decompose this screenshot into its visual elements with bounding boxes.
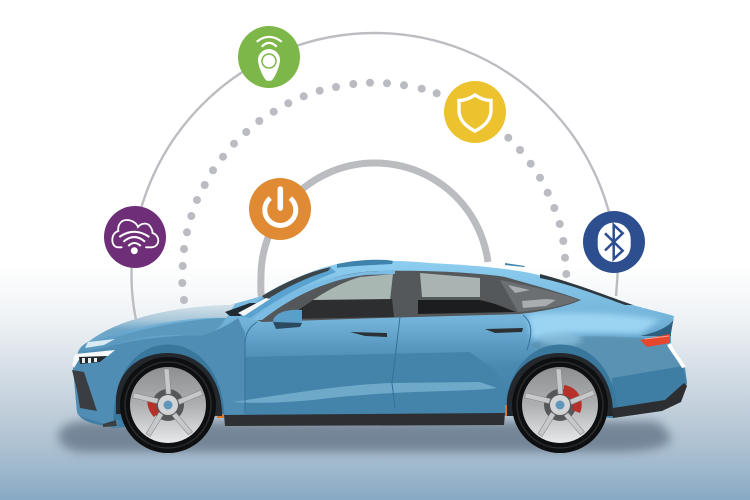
rear quarter window xyxy=(500,280,578,312)
rear diffuser xyxy=(613,383,687,418)
arch bands xyxy=(118,349,613,420)
A-pillar xyxy=(252,270,395,320)
rear lower band xyxy=(612,366,687,408)
tail white edge xyxy=(667,343,686,368)
rear wheel xyxy=(512,357,608,453)
car shadow xyxy=(58,421,670,452)
roof strip xyxy=(337,260,393,268)
wheel arches xyxy=(116,353,222,416)
orange trim xyxy=(217,405,510,418)
glasshouse frame xyxy=(257,271,581,322)
dotted connection arc xyxy=(178,79,570,304)
front wheel xyxy=(120,357,216,453)
inner connection arc xyxy=(261,163,488,300)
tail crease xyxy=(640,318,674,336)
cowl and wiper xyxy=(225,303,262,316)
car body xyxy=(73,260,687,428)
icon: cloud wifi xyxy=(104,206,166,268)
side mirror xyxy=(273,310,302,329)
side sill xyxy=(224,413,505,426)
door highlight strip xyxy=(233,382,497,403)
door lines xyxy=(245,315,531,413)
tail light xyxy=(640,334,670,347)
icon: power button xyxy=(249,178,311,240)
rear haunch highlight xyxy=(528,313,660,340)
rear door window xyxy=(420,273,480,297)
rear arch highlight xyxy=(538,334,582,346)
icon: security shield xyxy=(444,81,506,143)
outer connection arc xyxy=(132,33,618,320)
front window xyxy=(313,274,393,300)
rear glass edge xyxy=(540,274,633,305)
hood crease and fender xyxy=(110,318,226,340)
headlight xyxy=(72,339,115,368)
front grille xyxy=(72,370,97,411)
car xyxy=(60,255,700,453)
windshield xyxy=(238,268,336,318)
icon: wireless remote key xyxy=(238,26,300,88)
rear quarter panel xyxy=(530,336,686,385)
hood xyxy=(85,304,235,345)
door handles xyxy=(350,328,523,337)
icon: bluetooth xyxy=(583,211,645,273)
door lower shade xyxy=(246,352,485,364)
